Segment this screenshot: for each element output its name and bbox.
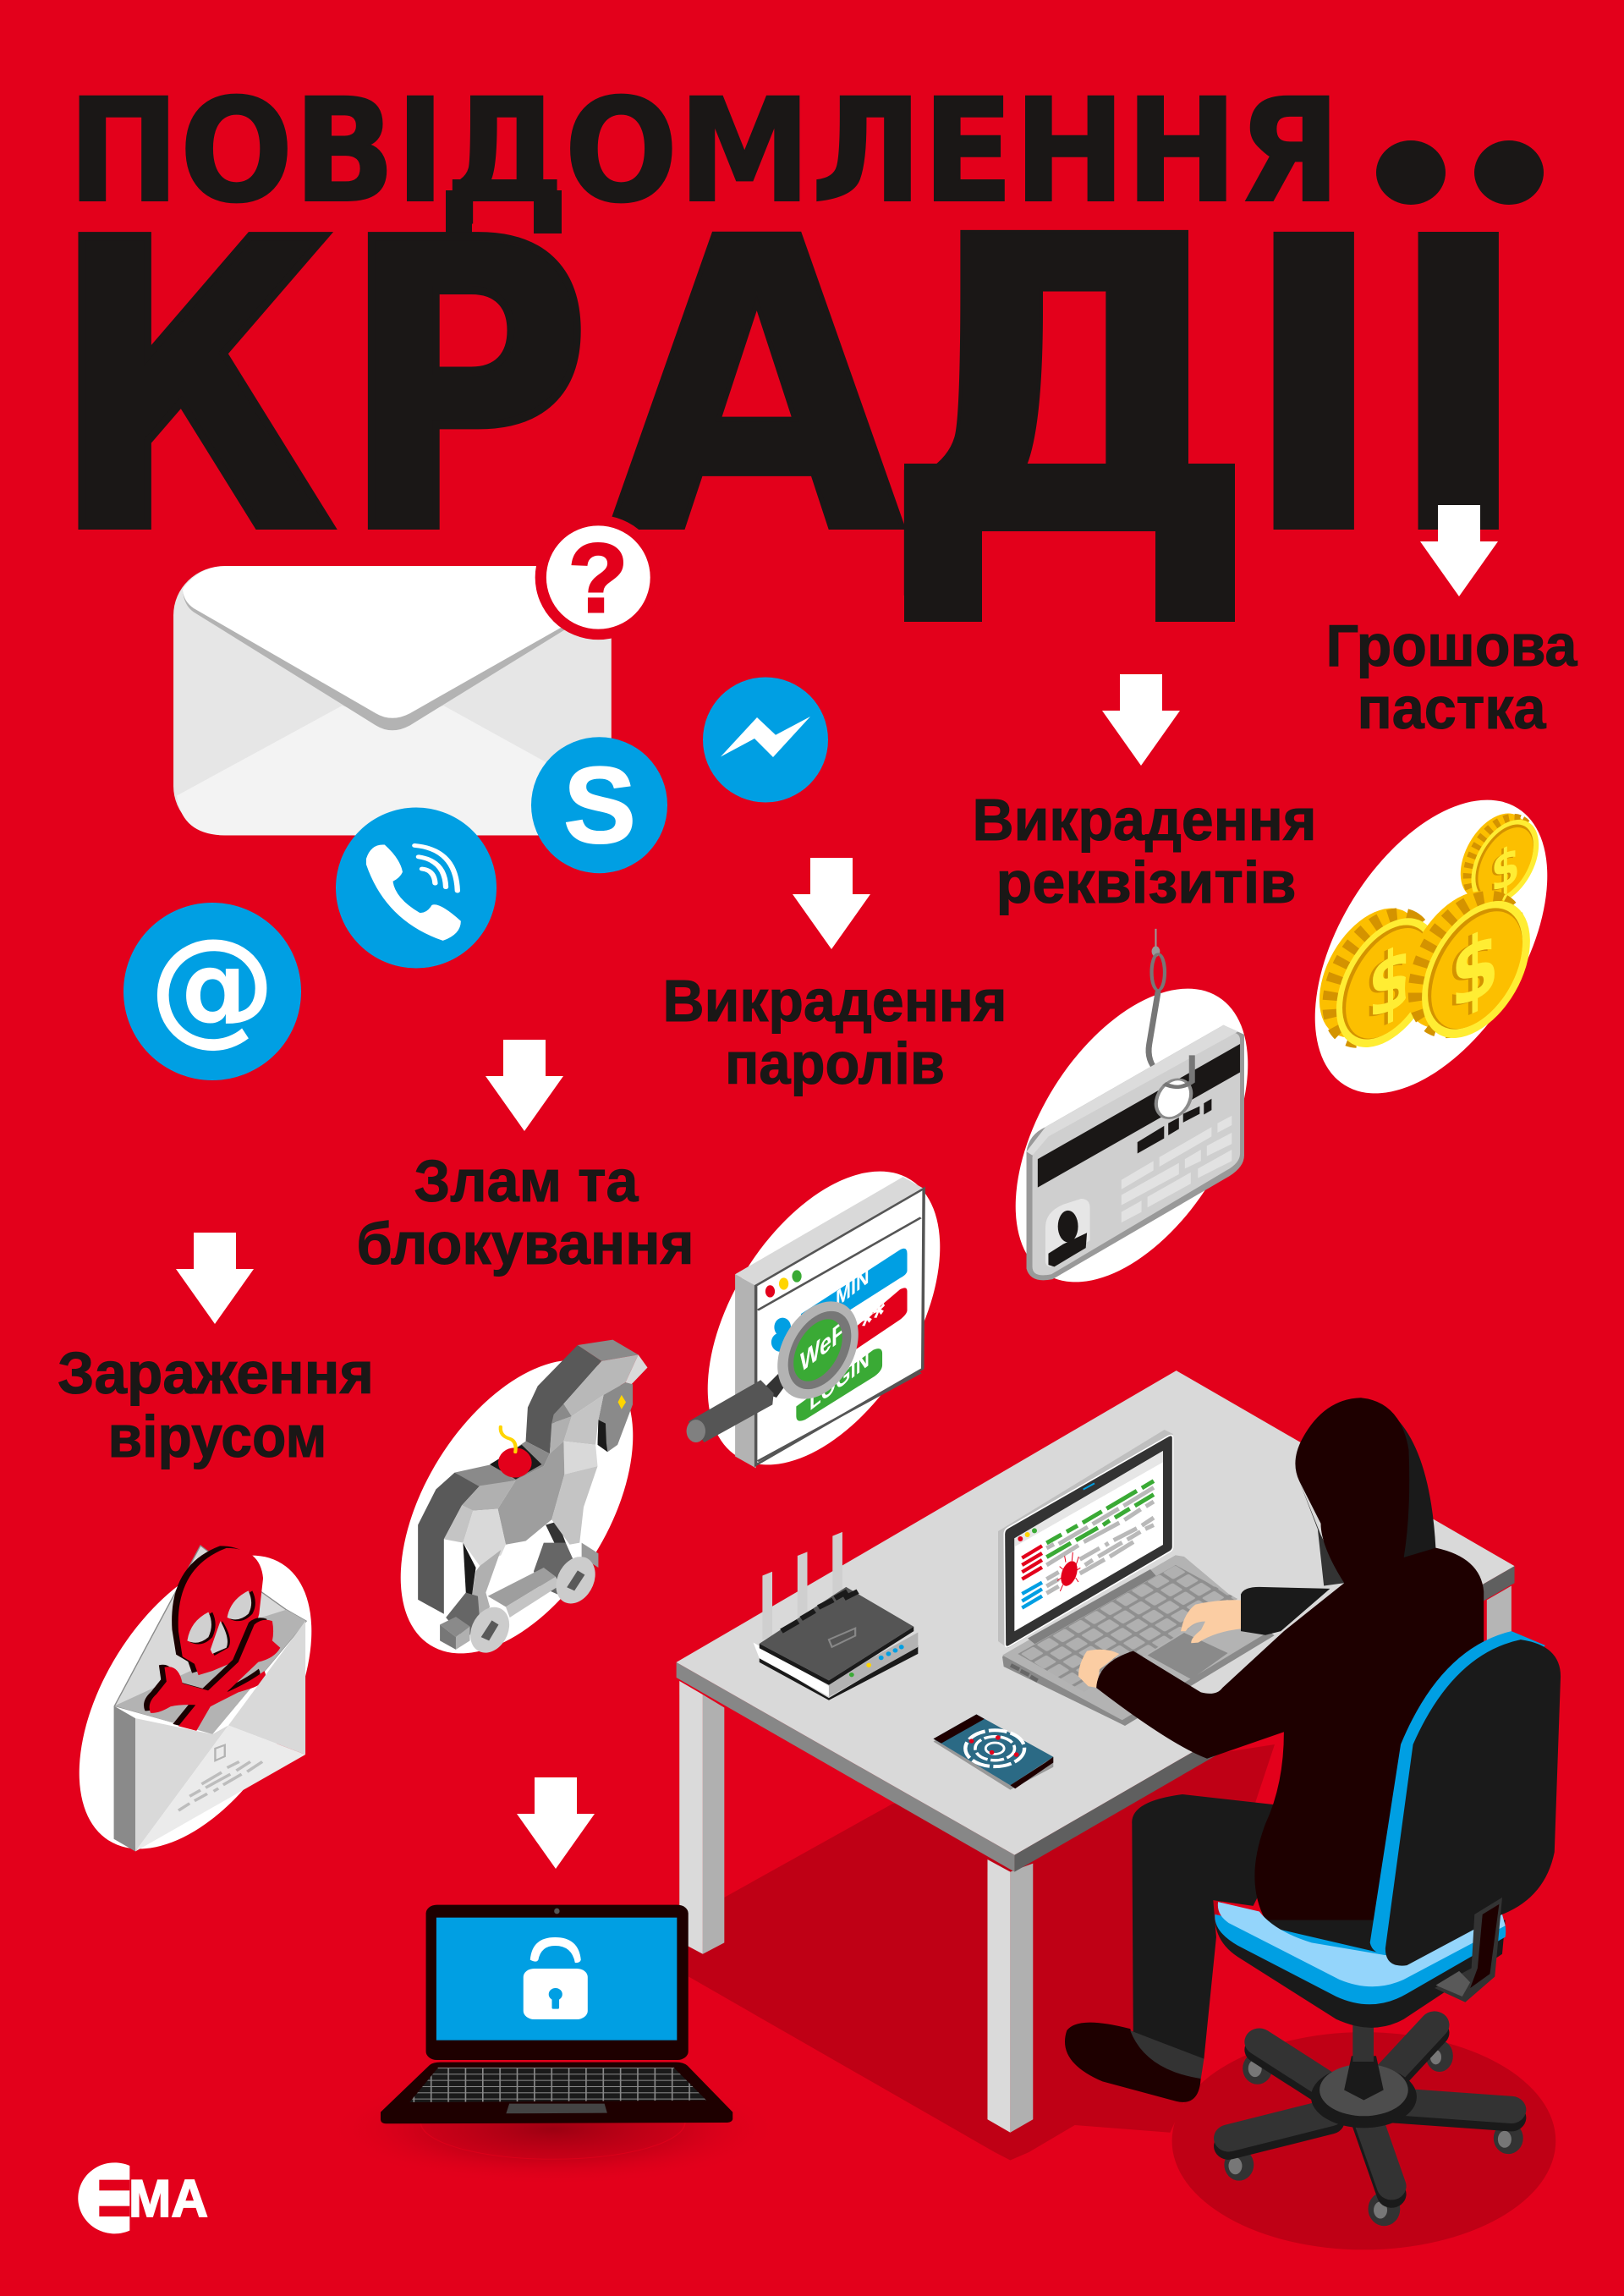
icon: login window with magnifier bbox=[687, 1171, 941, 1469]
hood rim bbox=[1361, 1398, 1435, 1563]
scene: chair base bbox=[1224, 2022, 1523, 2226]
magnifier: WeF bbox=[800, 1313, 844, 1379]
scene: laptop on desk bbox=[998, 1430, 1275, 1726]
left coin: $ bbox=[1364, 927, 1409, 1042]
label: Злам та блокування: Злам та bbox=[414, 1148, 639, 1214]
icon: skype bbox=[531, 737, 667, 873]
lid bbox=[426, 1905, 689, 2060]
right coin: $ bbox=[1451, 908, 1499, 1030]
title line: КРАДІЇ: Р bbox=[340, 158, 591, 619]
right coin bbox=[1383, 872, 1552, 1057]
logo: ЕМА bbox=[78, 2162, 208, 2233]
screen bbox=[436, 1918, 677, 2041]
title line: КРАДІЇ: Д bbox=[881, 151, 1255, 626]
right coin: $ bbox=[1446, 909, 1495, 1032]
icon: at sign: @ bbox=[149, 912, 276, 1059]
icon: locked laptop bbox=[327, 1905, 780, 2185]
scene: router bbox=[754, 1532, 918, 1700]
icon: login window with magnifier: MIN bbox=[836, 1261, 870, 1313]
icon: login window with magnifier: LOGIN bbox=[809, 1343, 870, 1416]
icon: at sign bbox=[123, 903, 301, 1080]
arrow: to hacking bbox=[486, 1040, 563, 1131]
card hole and hook tip bbox=[1151, 1055, 1196, 1120]
arrow: to money trap bbox=[1420, 505, 1498, 596]
scene: phone with fingerprint bbox=[934, 1715, 1053, 1790]
wheels bbox=[1224, 2041, 1523, 2226]
arrow: to password theft bbox=[793, 858, 870, 949]
title line: КРАДІЇ: Ї bbox=[1379, 146, 1539, 626]
label: Викрадення реквізитів: реквізитів bbox=[996, 849, 1296, 915]
card bbox=[1027, 1025, 1244, 1280]
icon: login window with magnifier: ** bbox=[861, 1292, 886, 1347]
bug bbox=[1057, 1552, 1080, 1591]
skull and bones bbox=[144, 1546, 280, 1731]
top coin: $ bbox=[1489, 832, 1517, 907]
arrow: to virus bbox=[176, 1233, 254, 1324]
hands bbox=[1181, 1600, 1243, 1643]
icon: messenger bbox=[703, 677, 828, 802]
base bbox=[381, 2063, 732, 2123]
label: Зараження вірусом: Зараження bbox=[58, 1340, 374, 1406]
title bbox=[50, 68, 1544, 626]
scene: office chair bbox=[1215, 1631, 1561, 2028]
label: Викрадення реквізитів: Викрадення bbox=[973, 787, 1316, 853]
left coin bbox=[1298, 891, 1459, 1065]
title line: КРАДІЇ: А bbox=[609, 155, 908, 623]
label: Зараження вірусом: вірусом bbox=[108, 1403, 326, 1469]
icon: infected envelope bbox=[31, 1515, 359, 1889]
icon: viber bbox=[336, 807, 497, 968]
label: Викрадення паролів: паролів bbox=[725, 1030, 945, 1096]
shoe bbox=[1065, 2023, 1201, 2102]
label: Грошова пастка: Грошова bbox=[1326, 612, 1578, 678]
icon: hooked bank card bbox=[968, 929, 1296, 1322]
top coin bbox=[1446, 802, 1553, 917]
legs bbox=[1132, 1794, 1278, 2063]
logo: ЕМА: МА bbox=[129, 2170, 208, 2228]
title line: КРАДІЇ: К bbox=[50, 158, 335, 619]
title line: КРАДІЇ: І bbox=[1234, 150, 1394, 626]
scene: desk shadow bbox=[689, 1744, 1555, 2249]
icon: envelope with question mark bbox=[173, 515, 661, 835]
icon: coins bbox=[1267, 760, 1595, 1134]
rear sleeve bbox=[1241, 1587, 1330, 1635]
label: Злам та блокування: блокування bbox=[357, 1211, 694, 1277]
top coin: $ bbox=[1491, 832, 1520, 906]
scene: desk bbox=[677, 1370, 1515, 2133]
title line: КРАДІЇ bbox=[50, 140, 1544, 626]
fish hook shank bbox=[1149, 929, 1165, 1072]
icon: trojan horse bbox=[353, 1320, 681, 1694]
arrow: to locked laptop bbox=[517, 1777, 595, 1869]
scene: hacker bbox=[1065, 1398, 1484, 2102]
torso bbox=[1096, 1398, 1484, 1959]
magnifier bbox=[687, 1301, 859, 1442]
icon: skype: S bbox=[563, 745, 636, 866]
title line: ПОВІДОМЛЕННЯ: ПОВІДОМЛЕННЯ bbox=[68, 68, 1341, 234]
label: Викрадення паролів: Викрадення bbox=[663, 968, 1007, 1034]
left coin: $ bbox=[1368, 926, 1413, 1041]
arrow: to details theft bbox=[1102, 674, 1180, 766]
label: Грошова пастка: пастка bbox=[1357, 675, 1547, 741]
icon: question mark: ? bbox=[568, 525, 628, 633]
padlock bbox=[524, 1937, 588, 2019]
